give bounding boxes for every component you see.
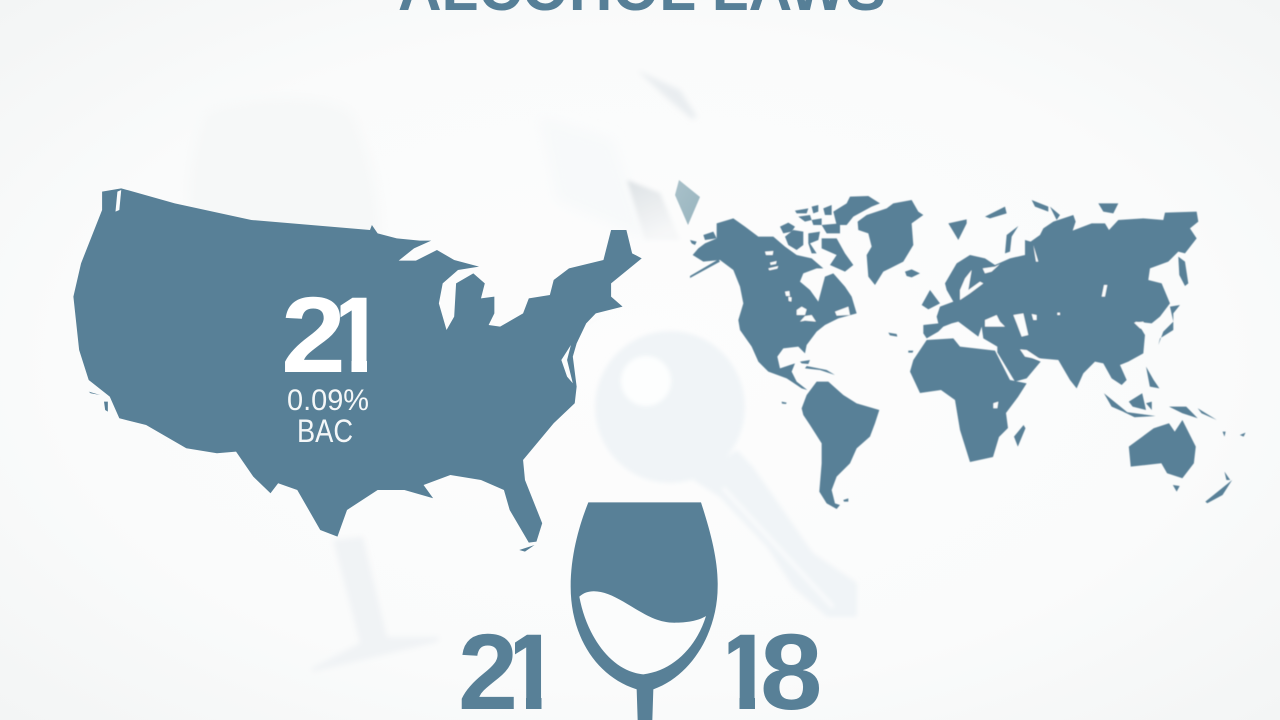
islands and inlets xyxy=(89,190,603,552)
North America and Greenland xyxy=(690,196,923,390)
ghost wine glass xyxy=(188,98,440,672)
Oceania and island groups xyxy=(1014,367,1246,503)
Africa and Eurasia xyxy=(910,200,1198,462)
ghost paper shard xyxy=(540,70,700,240)
wine glass icon xyxy=(571,502,718,720)
glass empty area xyxy=(579,591,706,674)
USA map xyxy=(73,188,642,552)
other drinking age xyxy=(728,611,822,720)
Central and South America xyxy=(782,360,879,509)
Eurasian seas and lakes xyxy=(960,245,1147,408)
world map xyxy=(690,196,1246,509)
BAC label: BAC xyxy=(297,413,353,449)
USA age label: 2 xyxy=(281,274,346,395)
icon: shard diamond xyxy=(675,180,700,225)
North American lakes xyxy=(747,251,850,362)
ghost key xyxy=(595,331,857,617)
USA BAC limit: 0.09% xyxy=(287,384,369,417)
USA age label: 1 xyxy=(326,274,387,395)
